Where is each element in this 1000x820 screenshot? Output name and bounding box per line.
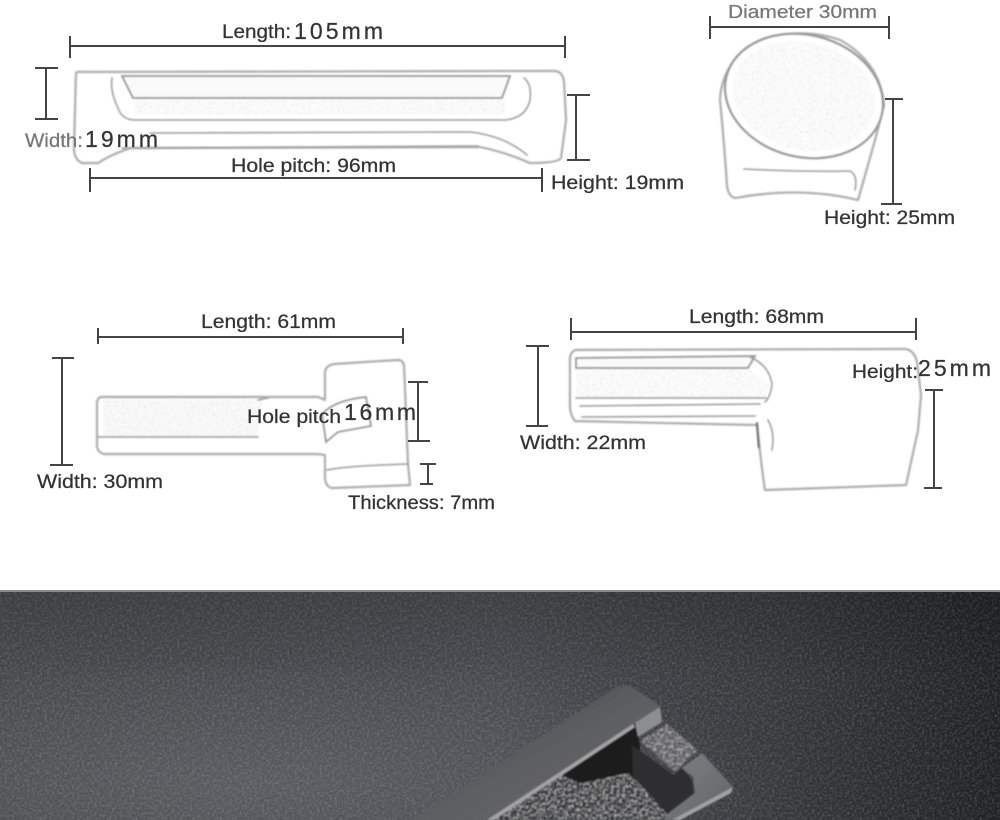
length dimension line	[571, 318, 916, 340]
label: 19mm value: 19mm	[85, 126, 158, 152]
width dimension bracket	[35, 68, 58, 119]
panel: L handle drawing	[520, 307, 991, 490]
panel: product photo	[0, 590, 1000, 820]
height dimension bracket	[924, 390, 943, 488]
long handle outline	[74, 71, 566, 163]
label: length 61mm: Length: 61mm	[201, 312, 336, 333]
label: length 68mm: Length: 68mm	[689, 307, 824, 328]
thickness dimension bracket	[420, 464, 436, 484]
label: height 25mm: Height: 25mm	[824, 208, 955, 229]
height dimension bracket	[881, 99, 903, 204]
knob outline	[712, 17, 896, 200]
width dimension bracket	[50, 358, 74, 465]
panel: long handle drawing	[25, 18, 684, 194]
label: height: Height:	[852, 362, 918, 383]
height dimension bracket	[567, 95, 590, 160]
length dimension line	[70, 36, 565, 58]
length dimension line	[98, 328, 403, 344]
label: width 30mm: Width: 30mm	[37, 472, 163, 493]
label: width: Width:	[25, 131, 83, 152]
label: length 105mm: Length:	[222, 22, 291, 43]
label: thickness 7mm: Thickness: 7mm	[348, 493, 495, 514]
label: diameter 30mm: Diameter 30mm	[728, 2, 877, 22]
label: 105mm value: 105mm	[294, 18, 383, 44]
photo background surface	[0, 590, 1000, 820]
diameter dimension line	[710, 16, 889, 39]
label: hole pitch: Hole pitch	[247, 407, 341, 428]
label: width 22mm: Width: 22mm	[520, 433, 646, 454]
label: 25mm value: 25mm	[918, 355, 991, 381]
width dimension bracket	[526, 346, 549, 426]
L handle outline	[570, 349, 921, 490]
label: 16mm value: 16mm	[344, 399, 416, 425]
hole pitch dimension bracket	[408, 382, 430, 441]
panel: T handle drawing	[37, 312, 495, 514]
label: height 19mm: Height: 19mm	[551, 173, 684, 194]
label: hole pitch 96mm: Hole pitch: 96mm	[231, 156, 396, 177]
T handle outline	[97, 360, 410, 488]
hole pitch dimension line	[90, 168, 542, 192]
photo: metal recessed handle	[413, 685, 733, 820]
panel: round knob drawing	[710, 2, 955, 229]
